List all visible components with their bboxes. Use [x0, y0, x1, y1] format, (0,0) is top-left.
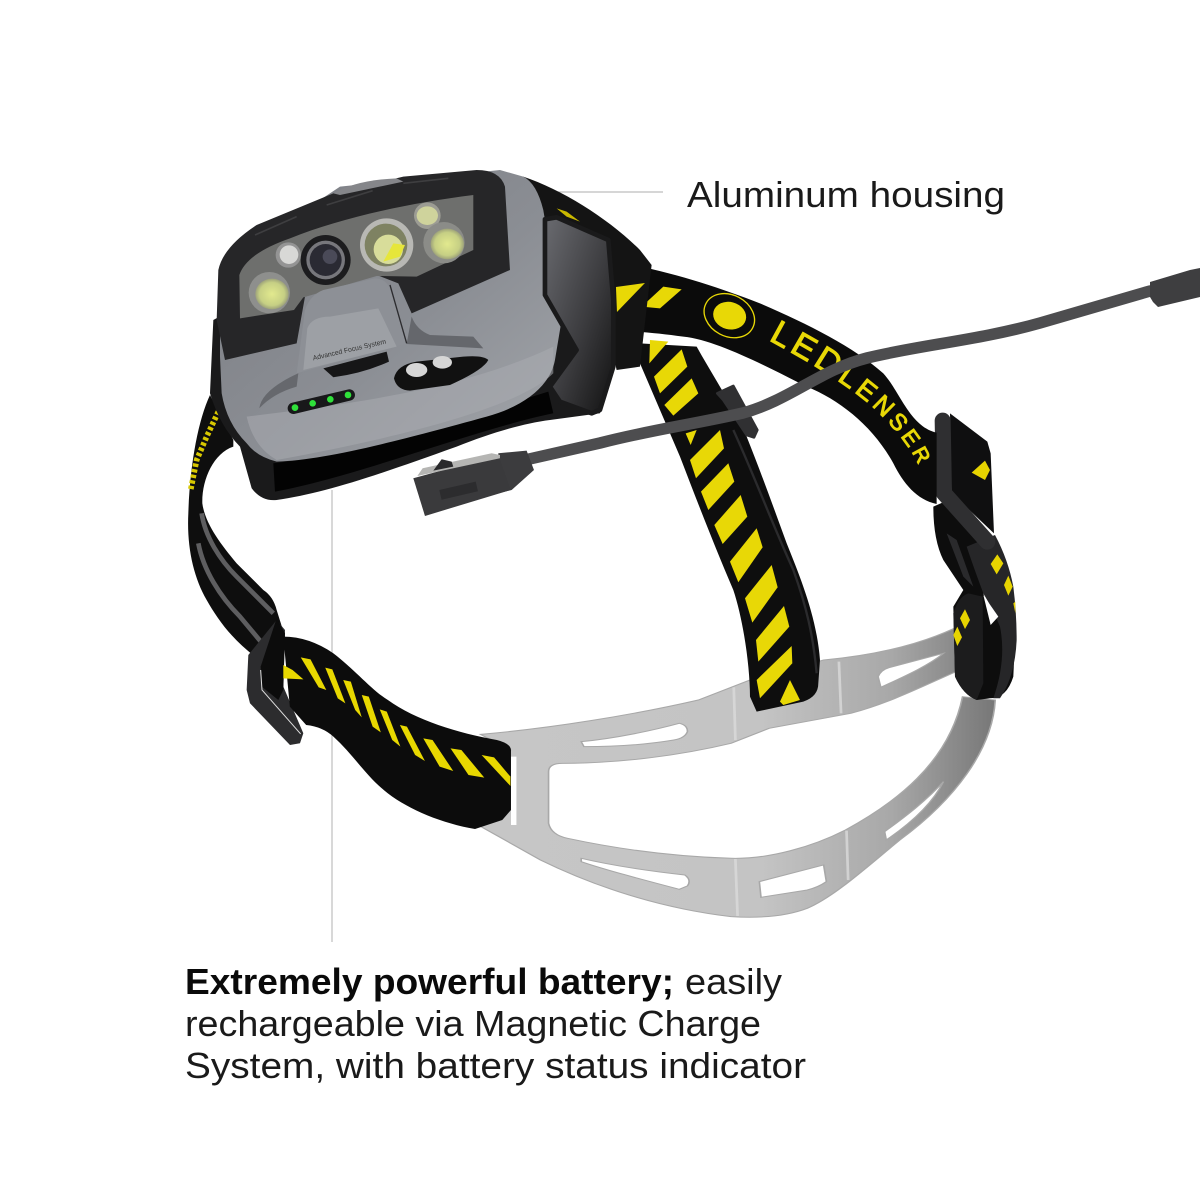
caption: battery: Extremely powerful battery; [185, 961, 674, 1002]
battery indicator [292, 392, 351, 411]
lower band [953, 593, 983, 700]
head strap with logo [644, 269, 937, 504]
brand name: LEDLENSER [770, 320, 930, 465]
upper buckle inner [950, 413, 994, 533]
yellow zigzag [191, 412, 218, 490]
bezel slots [255, 178, 448, 235]
white gap [983, 595, 998, 625]
side bracket [545, 217, 613, 413]
bottom body shade [247, 347, 553, 460]
chevrons [283, 657, 510, 786]
strap grey ridge 2 [198, 543, 273, 657]
caption: battery: rechargeable via Magnetic Charge [185, 1003, 761, 1044]
label on slider: Advanced Focus System [312, 339, 387, 362]
headlamp housing [210, 170, 652, 500]
camera-like lens [301, 235, 351, 285]
rear shell [210, 260, 613, 500]
grey body [220, 170, 562, 462]
yellow stripes [649, 340, 800, 705]
diamonds [953, 461, 1015, 646]
label: aluminum housing: Aluminum housing [687, 174, 1005, 215]
left strap [188, 395, 303, 745]
right twist buckle [933, 413, 1017, 700]
back twist band [933, 500, 1015, 700]
strap grey ridge 1 [202, 513, 273, 613]
buckle [247, 620, 303, 745]
lower strap [283, 637, 511, 829]
top band behind housing [523, 177, 652, 370]
led: top right [414, 202, 441, 229]
led: right flood [423, 222, 465, 263]
under-body recess [273, 392, 553, 492]
led: left flood [249, 272, 290, 313]
front bezel [217, 170, 510, 360]
yellow strap mark at mount [616, 283, 645, 312]
mesh slit [511, 757, 516, 825]
led: small white [276, 242, 301, 268]
cable end sleeve [1150, 268, 1200, 307]
focus wheel [323, 352, 389, 377]
lens panel [239, 195, 473, 318]
callout line: aluminum housing [558, 191, 663, 193]
strap marking [642, 287, 682, 308]
front twist band [967, 535, 1017, 698]
inner recess highlight [947, 533, 973, 587]
top button [333, 178, 403, 195]
mesh rear strap [475, 628, 995, 917]
led: center spot [360, 218, 413, 272]
vertical top strap [640, 340, 820, 712]
caption: battery [185, 961, 806, 1086]
magnetic charge connector [413, 451, 534, 516]
strap slider [717, 386, 757, 437]
logo [696, 285, 762, 346]
callout line: battery [331, 490, 333, 942]
button pod [394, 356, 488, 391]
caption: battery: easily [685, 961, 782, 1002]
caption: battery: System, with battery status indicator [185, 1045, 806, 1086]
strap edge [733, 430, 817, 673]
mesh facet edges [734, 662, 848, 916]
focus slider [297, 278, 407, 373]
charging cable [525, 268, 1200, 460]
buckle frame [943, 421, 987, 542]
shaded recess left [259, 373, 298, 408]
